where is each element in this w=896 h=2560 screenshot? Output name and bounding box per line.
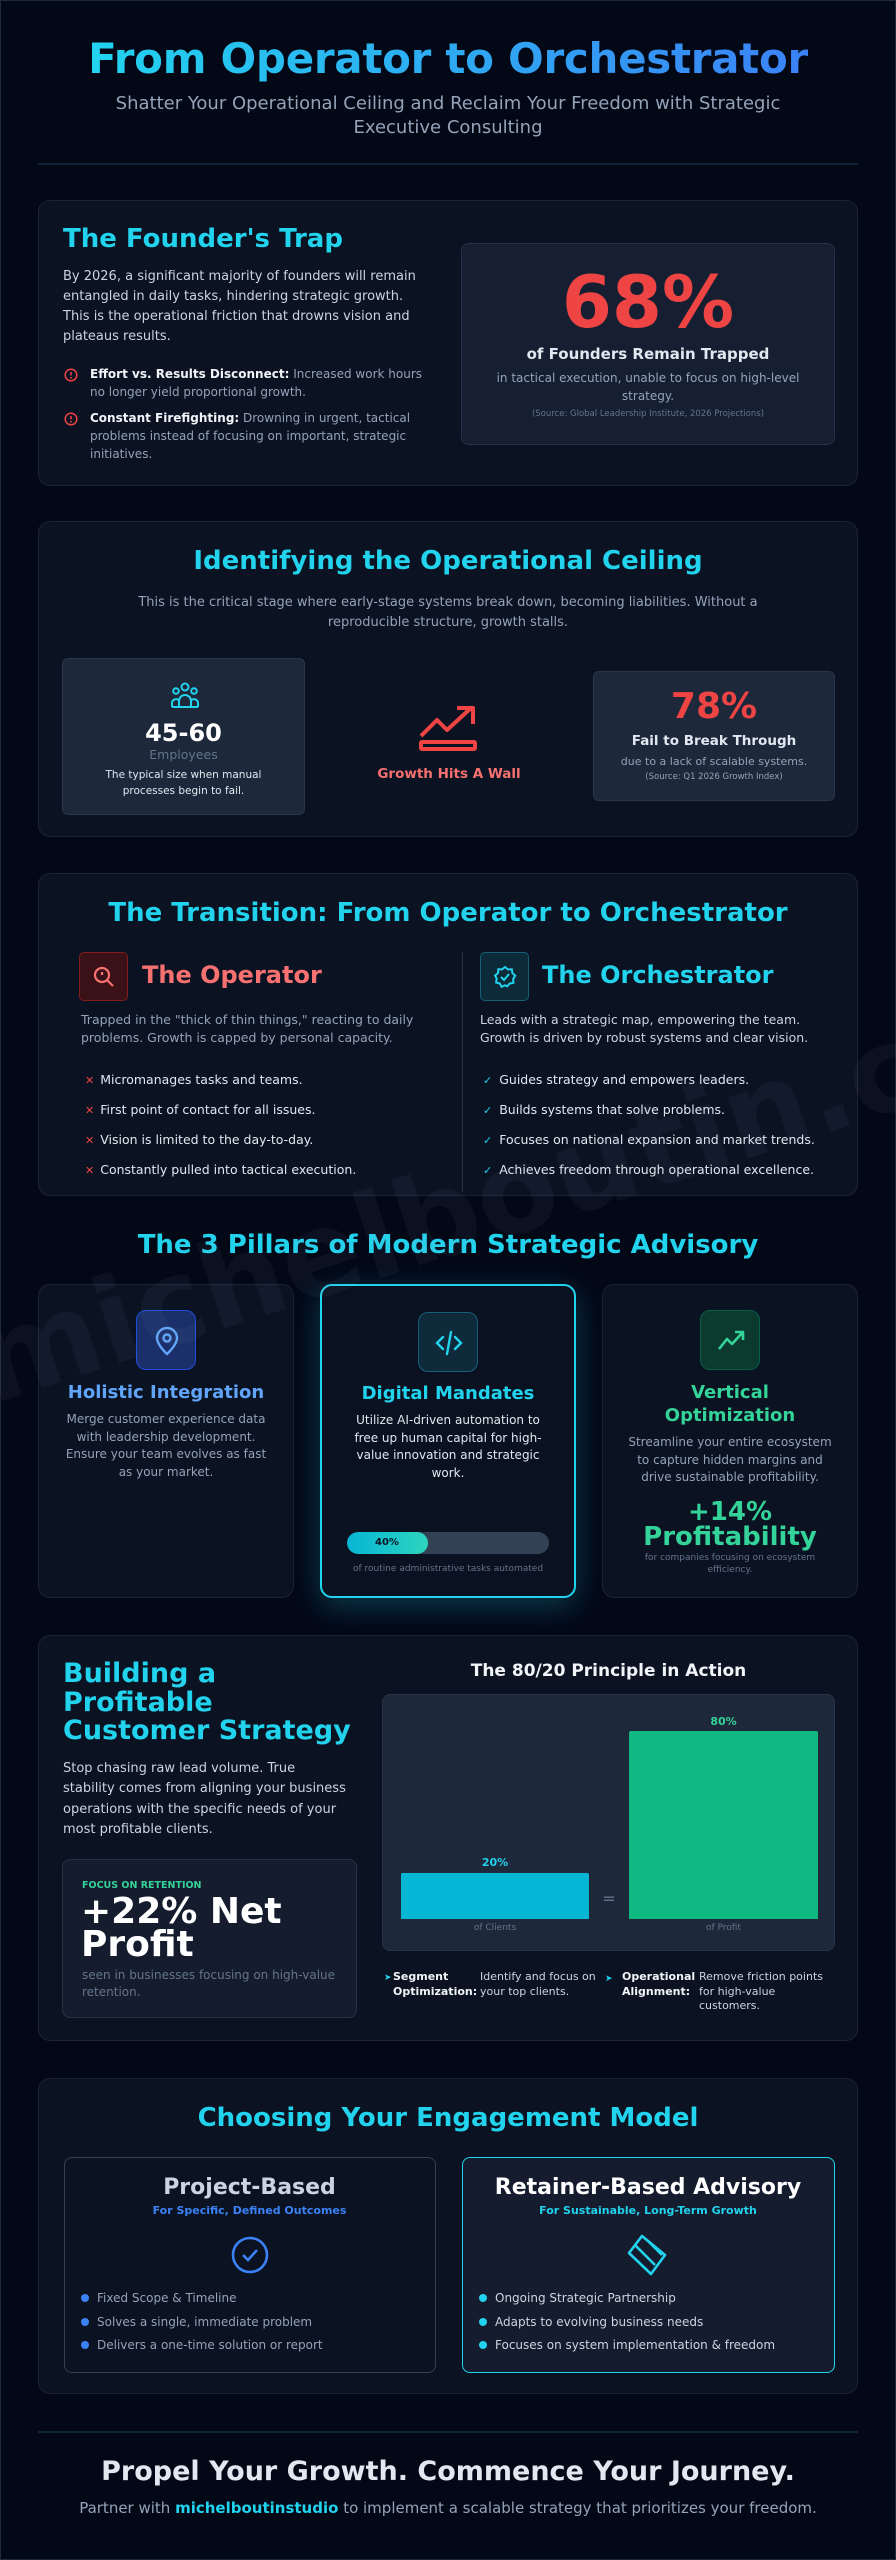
list: ✓ Guides strategy and empowers leaders. (483, 1072, 749, 1087)
chart title: The 80/20 Principle in Action (471, 1661, 746, 1681)
note: operational alignment: Alignment: (622, 1984, 690, 1998)
heading: Identifying the Operational Ceiling (193, 546, 703, 576)
panel: founder's trap (38, 200, 858, 486)
list: ✕ Constantly pulled into tactical execution. (85, 1162, 356, 1177)
text block (62, 269, 416, 344)
stat card: employees (62, 658, 305, 815)
card: digital mandates: work. (432, 1466, 464, 1480)
bullet: effort: Effort vs. Results Disconnect: Increased work hours (90, 367, 422, 381)
note: operational alignment: Remove friction points (699, 1970, 823, 1983)
bullet: firefighting: problems instead of focusing on important, strategic (90, 429, 406, 443)
title: From Operator to Orchestrator (88, 34, 808, 83)
bar chart (382, 1694, 835, 1951)
footer (79, 2456, 817, 2517)
progress bar (347, 1532, 549, 1554)
note: operational alignment: ➤ (605, 1974, 613, 1984)
list: ✕ Vision is limited to the day-to-day. (85, 1132, 313, 1147)
card: vertical optimization: drive sustainable profitability. (641, 1470, 819, 1484)
card: vertical optimization: Streamline your entire ecosystem (628, 1435, 832, 1449)
card: digital mandates (320, 1284, 576, 1598)
card: retainer-based: Ongoing Strategic Partnership (495, 2291, 676, 2305)
list (483, 1072, 815, 1177)
card: holistic integration: with leadership development. (77, 1430, 255, 1444)
panel: customer strategy (38, 1635, 858, 2041)
panel: engagement model (38, 2078, 858, 2394)
card: retainer-based (462, 2157, 835, 2373)
text block (63, 1761, 346, 1837)
icon: map pin (136, 1310, 196, 1370)
bar chart: of Clients (474, 1923, 516, 1933)
stat card: 78%: 78% (671, 686, 757, 727)
stat card: employees: The typical size when manual (106, 769, 261, 781)
stat card: employees: processes begin to fail. (123, 785, 244, 797)
list: ✓ Builds systems that solve problems. (483, 1102, 725, 1117)
column: orchestrator (480, 952, 815, 1177)
heading: Profitable (63, 1687, 213, 1718)
card: vertical optimization: for companies focusing on ecosystem (645, 1553, 815, 1563)
icon: circle check (232, 2236, 268, 2274)
card: holistic integration: as your market. (119, 1465, 213, 1479)
callout: retention: retention. (82, 1985, 141, 1999)
text block: most profitable clients. (63, 1822, 213, 1837)
text block: operations with the specific needs of your (63, 1802, 336, 1817)
icon: growth hits a wall (377, 706, 521, 782)
card: holistic integration: Ensure your team evolves as fast (66, 1447, 266, 1461)
heading: 3 pillars: The 3 Pillars of Modern Strategic Advisory (138, 1230, 758, 1260)
text block: stability comes from aligning your business (63, 1781, 346, 1796)
bullet: firefighting: initiatives. (90, 447, 152, 461)
description: problems. Growth is capped by personal capacity. (81, 1030, 393, 1045)
stat card: employees: Employees (149, 747, 218, 762)
card: digital mandates: free up human capital for high- (354, 1431, 542, 1445)
card: retainer-based: For Sustainable, Long-Term Growth (539, 2204, 757, 2217)
text block: plateaus results. (63, 329, 171, 344)
column: operator (79, 952, 413, 1177)
stat card: 68%: in tactical execution, unable to focus on high-level (497, 371, 799, 385)
card: digital mandates: value innovation and strategic (356, 1448, 540, 1462)
bar chart: 80% (710, 1715, 737, 1728)
stat card: 78%: due to a lack of scalable systems. (621, 755, 807, 768)
note: operational alignment: customers. (699, 1999, 760, 2012)
description (480, 1012, 808, 1045)
description (80, 1012, 413, 1045)
note: segment optimization: Identify and focus on (480, 1970, 596, 1983)
bullet: firefighting (64, 411, 410, 461)
bar chart: = (602, 1889, 616, 1908)
card: project-based: Fixed Scope & Timeline (97, 2291, 236, 2305)
heading: The Transition: From Operator to Orchestrator (108, 898, 788, 928)
icon: trending up (700, 1310, 760, 1370)
list: ✓ Achieves freedom through operational excellence. (483, 1162, 814, 1177)
icon: check badge (480, 952, 529, 1001)
panel: transition (38, 873, 858, 1196)
icon: alert (64, 368, 78, 382)
subtitle: Executive Consulting (353, 117, 543, 138)
bullet: effort: no longer yield proportional growth. (90, 385, 306, 399)
text block: This is the operational friction that drowns vision and (63, 309, 410, 324)
text block: By 2026, a significant majority of founders will remain (63, 269, 416, 284)
card: retainer-based: Retainer-Based Advisory (495, 2175, 801, 2200)
icon: growth hits a wall: Growth Hits A Wall (377, 766, 521, 782)
title: The Orchestrator (542, 961, 774, 989)
callout: retention: seen in businesses focusing on high-value (82, 1968, 335, 1982)
card: digital mandates: of routine administrative tasks automated (353, 1564, 543, 1574)
subtitle: Shatter Your Operational Ceiling and Reclaim Your Freedom with Strategic (116, 93, 780, 114)
footer title: Propel Your Growth. Commence Your Journey. (101, 2456, 795, 2487)
bar chart: of Profit (706, 1923, 741, 1933)
footer text: Partner with michelboutinstudio to implement a scalable strategy that prioritizes your freedom. (79, 2499, 817, 2517)
card: vertical optimization: to capture hidden margins and (637, 1452, 823, 1466)
heading (63, 1658, 351, 1746)
card: vertical optimization: efficiency. (708, 1565, 752, 1575)
description: Leads with a strategic map, empowering the team. (480, 1012, 800, 1027)
card: project-based: Project-Based (163, 2175, 336, 2200)
callout: retention: FOCUS ON RETENTION (82, 1880, 202, 1891)
card: retainer-based: Focuses on system implementation & freedom (495, 2338, 775, 2352)
icon: alert (64, 412, 78, 426)
stat card: 78%: (Source: Q1 2026 Growth Index) (645, 772, 783, 782)
heading: The Founder's Trap (63, 224, 343, 254)
stat card: 78%: Fail to Break Through (632, 733, 796, 749)
bullet: firefighting: Constant Firefighting: Drowning in urgent, tactical (90, 411, 410, 425)
card: digital mandates: Utilize AI-driven automation to (356, 1413, 540, 1427)
callout: retention (62, 1859, 357, 2018)
note: segment optimization: Optimization: (393, 1984, 477, 1998)
text block: Stop chasing raw lead volume. True (63, 1761, 295, 1776)
card: vertical optimization: Optimization (665, 1405, 795, 1426)
note: segment optimization: Segment (393, 1970, 448, 1983)
card: holistic integration: Merge customer experience data (67, 1412, 265, 1426)
note: segment optimization: your top clients. (480, 1984, 569, 1998)
card: digital mandates: Digital Mandates (362, 1383, 534, 1404)
card: project-based: For Specific, Defined Outcomes (153, 2204, 346, 2217)
callout: retention: +22% Net (81, 1891, 282, 1932)
description: This is the critical stage where early-stage systems break down, becoming liabilities. Without a (138, 595, 758, 610)
stat card: 78% (593, 671, 835, 801)
icon: users (171, 682, 199, 708)
callout: retention: Profit (81, 1924, 194, 1965)
card: vertical optimization: Profitability (643, 1522, 817, 1552)
list (85, 1072, 356, 1177)
card: project-based (64, 2157, 436, 2373)
description (138, 595, 758, 630)
card: vertical optimization: Vertical (691, 1382, 769, 1403)
list: ✕ Micromanages tasks and teams. (85, 1072, 303, 1087)
heading: Building a (63, 1658, 216, 1689)
stat card: 68% (461, 243, 835, 445)
list: ✕ First point of contact for all issues. (85, 1102, 315, 1117)
card: holistic integration: Holistic Integration (68, 1382, 264, 1403)
stat card: 68%: 68% (562, 260, 734, 344)
note: segment optimization: ➤ (384, 1973, 392, 1983)
note: operational alignment: for high-value (699, 1984, 775, 1998)
heading: Choosing Your Engagement Model (198, 2103, 698, 2133)
card: vertical optimization: +14% (688, 1497, 772, 1527)
stat card: 68%: (Source: Global Leadership Institute, 2026 Projections) (532, 409, 764, 419)
bullet: effort (64, 367, 422, 399)
stat card: 68%: strategy. (622, 389, 674, 403)
icon: magnifier (79, 952, 128, 1001)
card: project-based: Delivers a one-time solution or report (97, 2338, 323, 2352)
card: project-based: Solves a single, immediate problem (97, 2314, 312, 2328)
note: operational alignment (605, 1970, 823, 2012)
panel: operational ceiling (38, 521, 858, 837)
card: holistic integration (38, 1284, 294, 1598)
description: reproducible structure, growth stalls. (328, 615, 568, 630)
list: ✓ Focuses on national expansion and market trends. (483, 1132, 815, 1147)
bar chart: 20% (482, 1856, 508, 1869)
description: Trapped in the "thick of thin things," reacting to daily (81, 1012, 413, 1027)
stat card: employees: 45-60 (145, 719, 222, 747)
note: segment optimization (384, 1970, 596, 1998)
icon: code (418, 1312, 478, 1372)
heading: Customer Strategy (63, 1715, 351, 1746)
text block: entangled in daily tasks, hindering strategic growth. (63, 289, 403, 304)
description: Growth is driven by robust systems and clear vision. (480, 1030, 808, 1045)
subtitle (116, 93, 780, 138)
note: operational alignment: Operational (622, 1970, 695, 1983)
title: The Operator (142, 961, 322, 989)
card: vertical optimization (602, 1284, 858, 1598)
card: retainer-based: Adapts to evolving business needs (495, 2314, 703, 2328)
progress bar: 40% (375, 1537, 399, 1548)
icon: layered diamond (628, 2234, 666, 2276)
header (88, 34, 808, 138)
stat card: 68%: of Founders Remain Trapped (527, 345, 769, 363)
